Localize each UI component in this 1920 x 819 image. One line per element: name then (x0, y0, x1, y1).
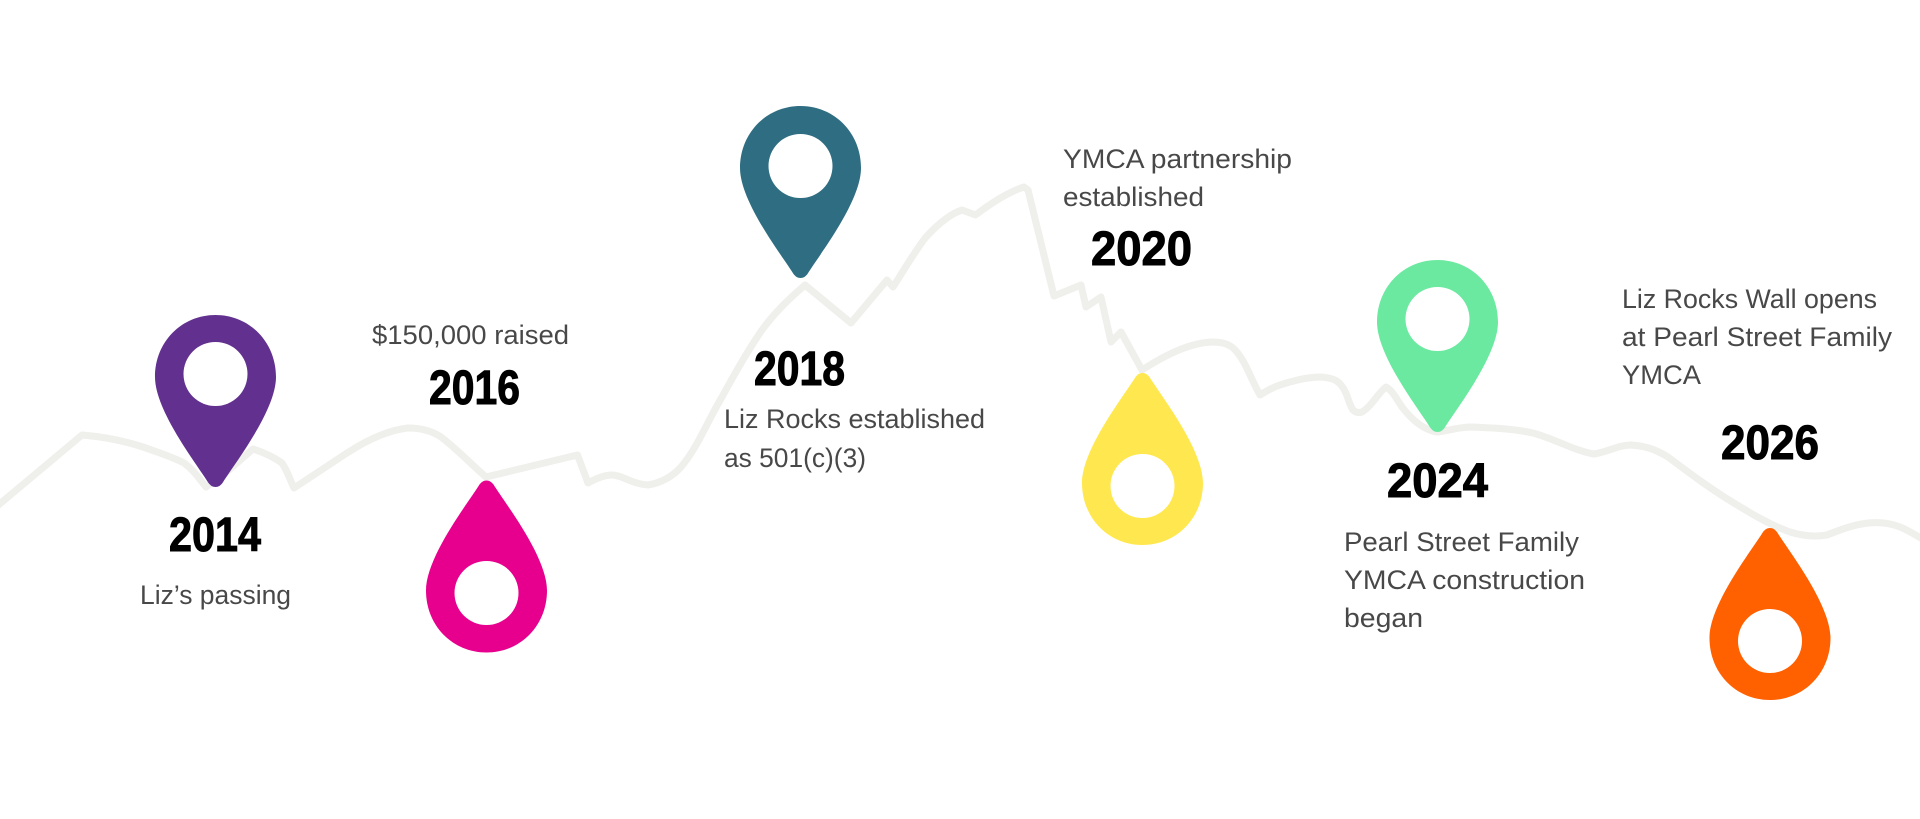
text: Liz Rocks established as 501(c)(3): as 501(c)(3) (724, 443, 866, 473)
text: Liz Rocks Wall opens at Pearl Street Family YMCA (1622, 284, 1893, 390)
year 2024: 2024 (1387, 455, 1488, 508)
milestone 2016 (372, 320, 569, 652)
text: Liz Rocks established as 501(c)(3) (724, 404, 985, 473)
milestone 2024 (1344, 260, 1585, 633)
icon: orange inverted pin (1710, 528, 1830, 700)
milestone 2026 (1622, 284, 1893, 700)
milestone 2018 (724, 106, 985, 473)
year 2026: 2026 (1721, 417, 1819, 470)
text: Liz Rocks Wall opens at Pearl Street Family YMCA: YMCA (1622, 360, 1701, 390)
icon: purple map pin (155, 315, 276, 487)
text: YMCA partnership established (1063, 144, 1292, 212)
year 2016: 2016 (429, 362, 520, 415)
text: Pearl Street Family YMCA construction began: Pearl Street Family (1344, 527, 1579, 557)
icon: pink inverted pin (426, 480, 547, 652)
text: Liz Rocks established as 501(c)(3): Liz Rocks established (724, 404, 985, 434)
text: YMCA partnership established: YMCA partnership (1063, 144, 1292, 174)
text: $150,000 raised: $150,000 raised (372, 320, 569, 350)
mountain ridge line (0, 187, 1920, 540)
year 2014: 2014 (169, 509, 261, 562)
year 2020: 2020 (1091, 223, 1192, 276)
icon: teal map pin (740, 106, 861, 278)
icon: green map pin (1377, 260, 1498, 432)
text: YMCA partnership established: established (1063, 182, 1204, 212)
year 2018: 2018 (754, 343, 845, 396)
icon: yellow inverted pin (1082, 373, 1203, 545)
text: Pearl Street Family YMCA construction began: YMCA construction (1344, 565, 1585, 595)
text: Pearl Street Family YMCA construction began: began (1344, 603, 1423, 633)
text: Liz Rocks Wall opens at Pearl Street Family YMCA: at Pearl Street Family (1622, 322, 1893, 352)
text: Liz Rocks Wall opens at Pearl Street Family YMCA: Liz Rocks Wall opens (1622, 284, 1877, 314)
text: Pearl Street Family YMCA construction began (1344, 527, 1585, 633)
milestone 2020 (1063, 144, 1292, 545)
text: Liz's passing: Liz’s passing (140, 580, 291, 610)
milestone 2014 (140, 315, 291, 610)
